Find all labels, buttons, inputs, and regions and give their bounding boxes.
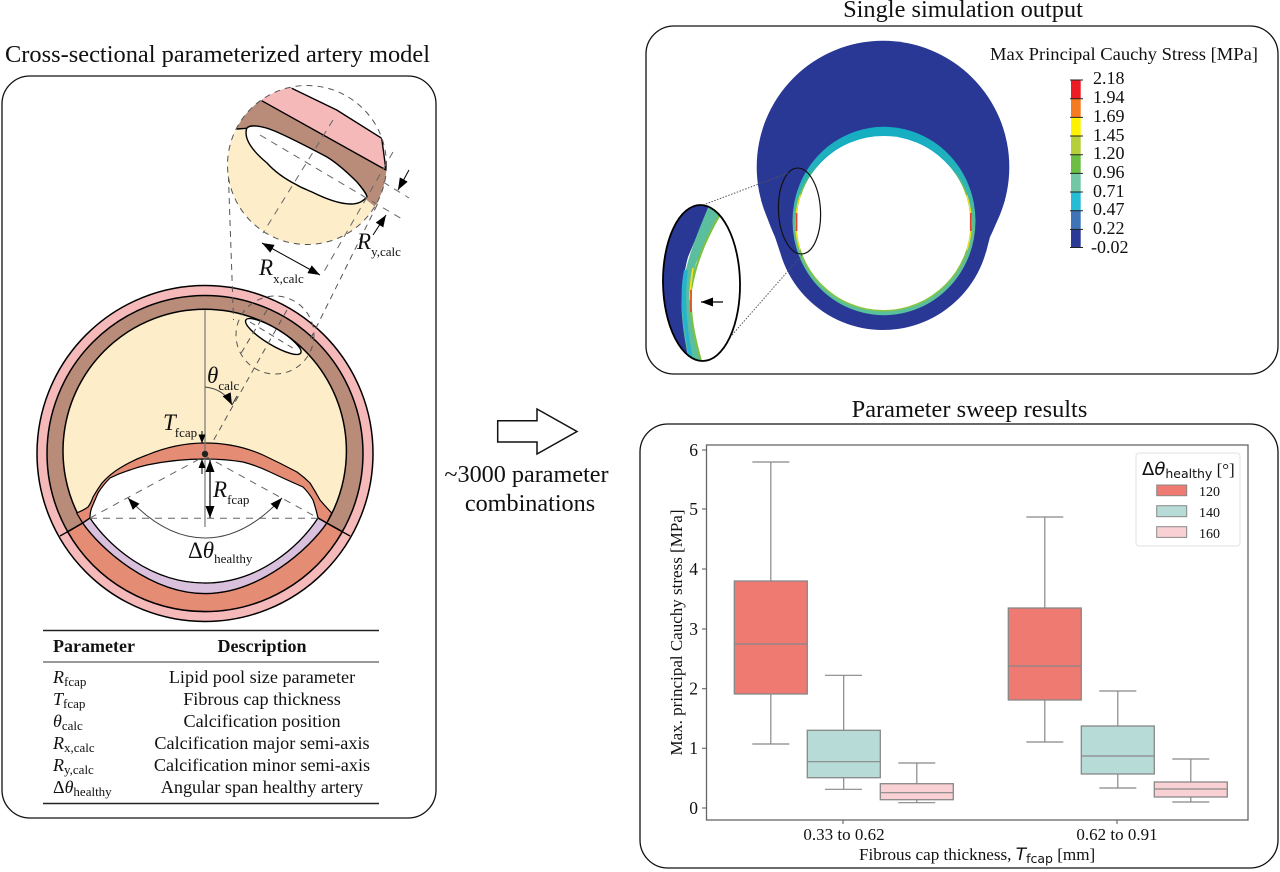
zoom lines to inset: [228, 165, 377, 340]
y ticks: 5: [689, 499, 698, 519]
label T fcap: T: [163, 410, 176, 435]
x tick labels: [803, 825, 1158, 844]
outer pink ring: [37, 286, 373, 622]
parameter table: Description: [218, 636, 306, 656]
panel: parameter sweep: [640, 424, 1278, 868]
stress field artery: [757, 41, 1009, 330]
section cut lines: [60, 518, 350, 536]
inset red peak: [690, 290, 692, 312]
colorbar labels: 0.71: [1093, 181, 1124, 201]
arrow to peak: [701, 301, 723, 303]
arrow: block right: [498, 409, 577, 454]
group 2 box red: [1008, 517, 1081, 742]
calcification ellipse: [242, 313, 305, 360]
inset teal band: [681, 203, 720, 365]
lumen: [796, 136, 970, 310]
row 4: R: [53, 733, 64, 753]
dashed zoom circle: [236, 296, 314, 374]
row 5: [52, 755, 370, 777]
x axis title: Fibrous cap thickness, T: [859, 845, 1026, 865]
inset lipid ellipse: [246, 126, 367, 204]
group 1 box red: [734, 462, 807, 744]
y ticks: 1: [689, 738, 698, 758]
label Rx calc: x,calc: [273, 271, 304, 286]
label theta calc: calc: [218, 378, 239, 393]
y ticks: 0: [689, 798, 698, 818]
blue body lower: [776, 116, 990, 330]
zoom ellipse: [776, 167, 823, 255]
group 1 box teal: [807, 675, 880, 789]
row 6: [53, 777, 364, 799]
y axis title: Max. principal Cauchy stress [MPa]: [667, 510, 686, 755]
panel: artery model: [2, 70, 436, 818]
legend: [1136, 453, 1240, 546]
row 1: Lipid pool size parameter: [169, 667, 355, 687]
y ticks: [689, 440, 1117, 824]
caption: parameter combinations: [444, 461, 609, 517]
row 6: Δθ: [53, 777, 73, 797]
row 3: [53, 711, 341, 733]
row 1: [52, 667, 355, 689]
y ticks: 6: [689, 440, 698, 460]
label Rx calc: R: [259, 255, 273, 280]
purple intima: [83, 518, 327, 594]
row 5: R: [53, 755, 64, 775]
label Ry calc: R: [357, 229, 371, 254]
row 5: y,calc: [64, 762, 94, 777]
legend title: healthy: [1165, 466, 1213, 481]
row 2: fcap: [63, 696, 85, 711]
salmon lower wall: [68, 523, 342, 612]
plot frame: [706, 445, 1248, 820]
x tick labels: 0.62 to 0.91: [1076, 825, 1158, 844]
legend title: Δθ: [1142, 459, 1165, 480]
cream plaque: [63, 309, 346, 523]
row 2: Fibrous cap thickness: [183, 689, 341, 709]
theta arc: [205, 387, 232, 405]
blue body upper: [757, 41, 1009, 293]
colorbar labels: 0.22: [1093, 218, 1124, 238]
x axis title: [mm]: [1053, 845, 1095, 864]
row 1: fcap: [64, 674, 86, 689]
colorbar labels: 1.45: [1093, 125, 1124, 145]
row 4: [52, 733, 370, 755]
calcification axes: [212, 310, 296, 443]
y ticks: 4: [689, 559, 698, 579]
legend title: Max Principal Cauchy Stress [MPa]: [990, 44, 1258, 64]
inset green rim: [691, 216, 719, 365]
label delta theta: healthy: [214, 551, 253, 566]
parameter table: [43, 630, 379, 804]
box plot: [667, 440, 1248, 866]
row 1: R: [53, 667, 64, 687]
row 2: [53, 689, 341, 711]
artery cross-section: [37, 286, 373, 622]
panel: simulation output: [646, 26, 1278, 374]
label R fcap: fcap: [227, 492, 249, 507]
x axis title: fcap: [1026, 851, 1053, 866]
row 6: healthy: [73, 784, 112, 799]
title: parameter sweep: Parameter sweep results: [852, 396, 1087, 423]
horizontal dashed chord: [90, 517, 318, 519]
x tick labels: 0.33 to 0.62: [803, 825, 885, 844]
colorbar: [1070, 80, 1083, 248]
colorbar labels: 1.94: [1093, 87, 1124, 107]
dotted zoom lines: [703, 173, 802, 335]
Ry arrow upper: [398, 170, 409, 190]
inset blue: [664, 206, 708, 354]
row 3: θ: [53, 711, 62, 731]
legend 120: 120: [1199, 485, 1220, 500]
Ry arrow lower: [373, 215, 386, 235]
label R fcap: R: [213, 477, 227, 502]
row 2: T: [53, 689, 63, 709]
group 2 box teal: [1081, 691, 1154, 788]
inset zoom circle: [222, 70, 409, 286]
y ticks: 3: [689, 619, 698, 639]
peak stress left: [796, 213, 798, 231]
row 3: Calcification position: [183, 711, 341, 731]
caption: parameter combinations: ~3000 parameter: [444, 461, 609, 488]
delta arc: [128, 498, 282, 538]
legend 160: 160: [1199, 527, 1220, 542]
colorbar labels: -0.02: [1091, 237, 1128, 257]
title: artery model: Cross-sectional parameterized artery model: [5, 42, 430, 68]
row 3: calc: [62, 718, 83, 733]
center dot: [202, 451, 208, 457]
row 4: Calcification major semi-axis: [154, 733, 370, 753]
row 4: x,calc: [64, 740, 95, 755]
row 5: Calcification minor semi-axis: [154, 755, 370, 775]
ring inner rim: [795, 134, 972, 312]
dashed span lines: [90, 456, 318, 518]
inset dashed axes: [260, 120, 409, 275]
legend title: [°]: [1212, 460, 1235, 479]
T arrow upper: [201, 431, 203, 444]
group 1 box pink: [880, 763, 953, 803]
fibrous cap: [77, 443, 332, 523]
label Ry calc: y,calc: [371, 244, 401, 259]
legend 140: 140: [1199, 506, 1220, 521]
label T fcap: fcap: [175, 425, 197, 440]
inset cream: [228, 86, 386, 244]
peak stress right: [970, 213, 972, 231]
yellow rim left: [796, 195, 800, 250]
inset stress view: [660, 200, 741, 365]
stress ring: [792, 127, 976, 315]
T arrow lower: [201, 459, 203, 474]
y ticks: 2: [689, 678, 698, 698]
colorbar labels: 0.47: [1093, 199, 1124, 219]
blue body neck: [761, 200, 1005, 252]
group 2 box pink: [1154, 759, 1227, 802]
colorbar labels: [1091, 68, 1128, 257]
label delta theta: Δθ: [188, 538, 214, 563]
colorbar labels: 1.20: [1093, 143, 1124, 163]
theta tick: [232, 396, 237, 405]
caption: parameter combinations: combinations: [465, 490, 595, 517]
inset wall: [236, 86, 386, 206]
yellow rim right: [967, 195, 971, 250]
colorbar labels: 0.96: [1093, 162, 1124, 182]
colorbar labels: 1.69: [1093, 106, 1124, 126]
R arrow: [209, 460, 211, 518]
lipid pool: [90, 459, 318, 583]
colorbar labels: 2.18: [1093, 68, 1124, 88]
Rx arrow: [262, 243, 320, 275]
inset dashed outline: [228, 86, 386, 244]
label theta calc: θ: [207, 363, 218, 388]
vertical axis: [204, 310, 206, 527]
row 6: Angular span healthy artery: [161, 777, 364, 797]
table header: Parameter: [53, 636, 135, 656]
brown upper wall: [47, 296, 363, 612]
